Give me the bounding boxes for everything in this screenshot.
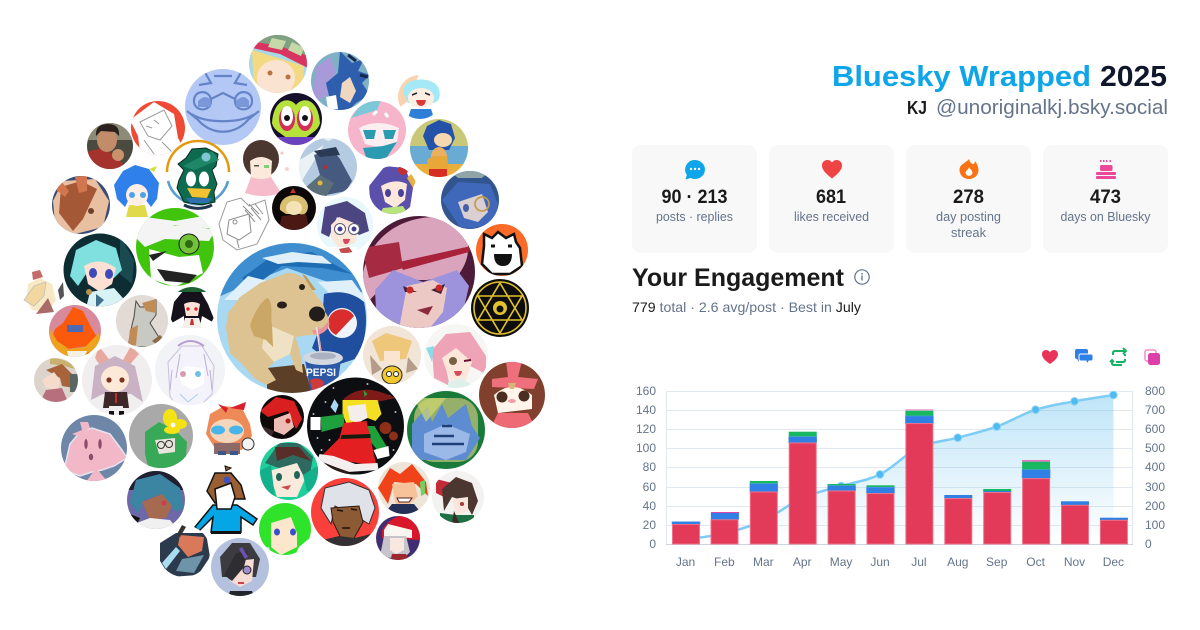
avatar: santa hat silver hair <box>375 515 421 562</box>
month labels: Jun <box>870 555 890 569</box>
bar: Nov <box>1061 501 1089 544</box>
engagement summary: 779 total · 2.6 avg/post · Best in July <box>632 299 861 315</box>
avatar: girl with glasses <box>316 196 374 254</box>
avatar: green duck with ring <box>167 141 229 208</box>
avatar: blonde on black <box>272 186 316 230</box>
month labels: Feb <box>714 555 735 569</box>
bar: Jun <box>866 485 894 544</box>
avatar: brown haired girl <box>51 175 111 235</box>
title: Bluesky Wrapped 2025: 2025 <box>1100 61 1167 93</box>
left axis labels: 0 <box>649 537 656 551</box>
avatar: pink haired winking girl <box>423 323 489 389</box>
avatar: cream sketch cat-girl <box>362 325 422 385</box>
user name and handle: @unoriginalkj.bsky.social <box>936 97 1168 119</box>
avatar cluster <box>21 34 546 597</box>
bar: Jul <box>905 409 933 544</box>
avatar: blonde in green and red Christmas dress <box>306 377 404 475</box>
avatar: line sketch <box>219 198 269 250</box>
avatar: black and red hair <box>259 394 305 440</box>
left axis labels: 100 <box>636 441 656 455</box>
month labels: Jan <box>676 555 695 569</box>
avatar: bunny-ear figure <box>81 344 153 416</box>
avatar: orange haired grinning hero <box>377 461 431 515</box>
avatar: girl in pink kimono <box>243 140 289 196</box>
avatar: pink blob <box>60 414 128 482</box>
month labels: Apr <box>793 555 812 569</box>
avatar: red and white sketch <box>131 101 185 155</box>
right axis labels: 100 <box>1145 518 1165 532</box>
avatar: cyan haired girl <box>63 233 137 308</box>
avatar: bright green hair <box>258 502 312 556</box>
icon: quotes layered squares <box>1145 350 1160 365</box>
bar: Aug <box>944 495 972 544</box>
bar: May <box>828 484 856 544</box>
legend icons <box>1042 348 1160 365</box>
month labels: Sep <box>986 555 1008 569</box>
bar: Sep <box>983 489 1011 544</box>
avatar: green hair yellow bow <box>128 403 194 470</box>
right axis labels: 400 <box>1145 460 1165 474</box>
avatar: dark knight under rays <box>298 137 358 197</box>
bars <box>672 409 1128 544</box>
month labels: Aug <box>947 555 968 569</box>
icon: flame <box>960 159 978 179</box>
stat card: posts and replies <box>632 145 757 253</box>
stat card: likes received: 681 <box>816 187 846 208</box>
month labels: May <box>830 555 852 569</box>
avatar: small blonde sketch girl <box>21 270 64 314</box>
stat card: day posting streak: day posting <box>936 210 1001 224</box>
avatar: man in red shirt <box>86 122 134 170</box>
left axis labels <box>636 384 656 551</box>
bar: Jan <box>672 522 700 544</box>
avatar: dark-skinned man on red <box>310 477 380 547</box>
stat card: likes received <box>769 145 894 253</box>
avatar: green bandaged character <box>135 207 215 287</box>
left axis labels: 60 <box>643 480 656 494</box>
avatar: large dog drinking Pepsi <box>216 242 368 394</box>
avatar: green alien <box>269 92 323 146</box>
right axis labels: 300 <box>1145 480 1165 494</box>
avatar: purple haired girl <box>369 166 416 214</box>
avatar: white creature on orange <box>475 223 529 277</box>
user name and handle: KJ <box>907 98 927 118</box>
left axis labels: 80 <box>643 460 656 474</box>
avatar: pale sketch girl <box>154 334 226 406</box>
bar: Apr <box>789 432 817 544</box>
month labels <box>676 555 1124 569</box>
avatar: orange-haired plush <box>206 402 254 455</box>
cumulative line <box>686 391 1117 540</box>
avatar: ice fairy <box>398 75 440 119</box>
stat card: posts and replies: 90 · 213 <box>662 187 728 208</box>
avatar: calico cat <box>115 294 169 348</box>
icon: birthday cake <box>1096 160 1116 179</box>
avatar: pink hair <box>347 100 407 160</box>
avatar: raven girl with green bow <box>170 287 214 328</box>
title: Bluesky Wrapped 2025: Bluesky Wrapped <box>832 61 1091 93</box>
avatar: blue spiky hair girl <box>114 165 159 217</box>
right axis labels <box>1145 384 1165 551</box>
icon: likes heart <box>1042 350 1058 364</box>
month labels: Jul <box>911 555 927 569</box>
left axis labels: 40 <box>643 499 656 513</box>
icon: replies speech bubbles <box>1075 349 1093 364</box>
stat card: days on Bluesky: days on Bluesky <box>1060 210 1151 224</box>
avatar: blue hedgehog <box>310 51 370 111</box>
avatar: hair covering eye <box>210 537 270 597</box>
right axis labels: 0 <box>1145 537 1152 551</box>
bar: Dec <box>1100 518 1128 544</box>
stat card: day posting streak <box>906 145 1031 253</box>
left axis labels: 140 <box>636 403 656 417</box>
right axis labels: 700 <box>1145 403 1165 417</box>
stat card: day posting streak: 278 <box>953 187 984 208</box>
left axis labels: 160 <box>636 384 656 398</box>
month labels: Oct <box>1026 555 1046 569</box>
right axis labels: 600 <box>1145 422 1165 436</box>
chart: monthly engagement bars with cumulative line <box>636 384 1165 569</box>
right axis labels: 800 <box>1145 384 1165 398</box>
bar: Mar <box>750 481 778 544</box>
month labels: Nov <box>1064 555 1085 569</box>
icon: info <box>855 270 869 284</box>
avatar: orange crown creature <box>48 304 102 359</box>
bar: Oct <box>1022 460 1050 544</box>
avatar: large dog drinking Pepsi: PEPSI <box>306 367 336 379</box>
right axis labels: 200 <box>1145 499 1165 513</box>
avatar: blue smiling frog <box>183 68 263 146</box>
right axis labels: 500 <box>1145 441 1165 455</box>
stat card: days on Bluesky <box>1043 145 1168 253</box>
avatar: sword warrior <box>160 525 210 576</box>
stat card: days on Bluesky: 473 <box>1090 187 1121 208</box>
left axis labels: 120 <box>636 422 656 436</box>
heading: Your Engagement: Your Engagement <box>632 264 845 292</box>
cumulative area <box>686 395 1113 544</box>
left axis labels: 20 <box>643 518 656 532</box>
avatar: shrine maiden <box>431 470 485 525</box>
avatar: teal hair girl <box>259 441 319 501</box>
stat card: posts and replies: posts · replies <box>656 210 733 224</box>
avatar: gold hexagram seal <box>470 278 530 338</box>
icon: heart <box>822 160 842 178</box>
avatar: blue hair with monocle <box>440 170 500 230</box>
avatar: blonde girl with striped hat <box>248 34 308 96</box>
icon: chat bubble <box>685 160 705 180</box>
bar: Feb <box>711 512 739 544</box>
avatar: girl with brown bun <box>33 357 79 403</box>
month labels: Mar <box>753 555 774 569</box>
avatar: blue pixel creature <box>406 390 486 470</box>
avatar: dark-skinned blue hair <box>126 470 186 530</box>
avatar: brown hair red bow <box>478 361 546 429</box>
chart grid and axes <box>666 391 1133 544</box>
avatar: classic blue hedgehog <box>409 118 469 178</box>
icon: reposts arrows <box>1110 348 1126 365</box>
stat card: day posting streak: streak <box>951 226 987 240</box>
avatar: drawn figure in blue sweater <box>195 466 257 534</box>
month labels: Dec <box>1103 555 1124 569</box>
avatar: vampire in pink hat <box>362 215 476 329</box>
stat card: likes received: likes received <box>794 210 869 224</box>
